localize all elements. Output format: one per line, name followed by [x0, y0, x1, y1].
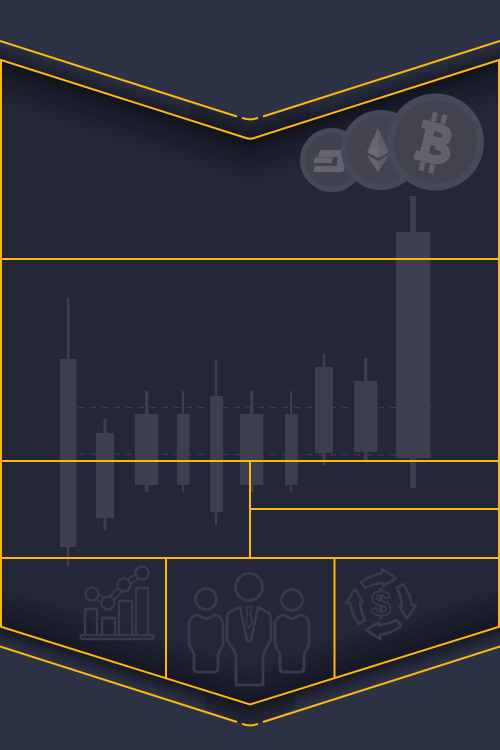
ethereum coin — [341, 110, 421, 190]
centre person — [227, 574, 271, 685]
bottom chevron shadow — [0, 572, 500, 726]
icon: money cycle — [346, 569, 416, 639]
candle 3 — [135, 391, 158, 492]
top outer chevron — [0, 41, 500, 119]
dollar sign: $ — [371, 583, 391, 624]
candle 7 — [285, 391, 298, 492]
bottom icons — [80, 566, 416, 685]
candle 9 — [354, 358, 377, 460]
left person — [189, 588, 223, 672]
candle 6 — [240, 391, 263, 492]
candle 2 — [96, 419, 114, 530]
top inner chevron and sides — [1, 60, 499, 626]
icon: business people — [189, 574, 309, 685]
arrow right — [397, 584, 416, 619]
arrow left — [346, 589, 365, 624]
arrow bottom — [366, 620, 401, 639]
top chevron shadow — [0, 41, 500, 204]
right person — [275, 590, 309, 672]
candle 1 — [60, 298, 76, 566]
candle 8 — [315, 354, 333, 465]
grid rows — [0, 259, 500, 558]
dashed guide lines — [66, 408, 432, 455]
icon: growth chart — [80, 566, 154, 639]
candle 10 — [396, 196, 430, 488]
dash coin — [300, 128, 364, 192]
coins cluster — [300, 94, 484, 192]
candle 5 — [210, 359, 223, 525]
candle 4 — [177, 391, 190, 492]
bottom outer chevron — [0, 646, 500, 725]
icon cell dividers — [166, 558, 334, 678]
bottom inner chevron — [0, 626, 500, 704]
bitcoin coin — [387, 94, 484, 190]
arrow top — [361, 569, 396, 588]
candlestick chart — [60, 196, 432, 566]
